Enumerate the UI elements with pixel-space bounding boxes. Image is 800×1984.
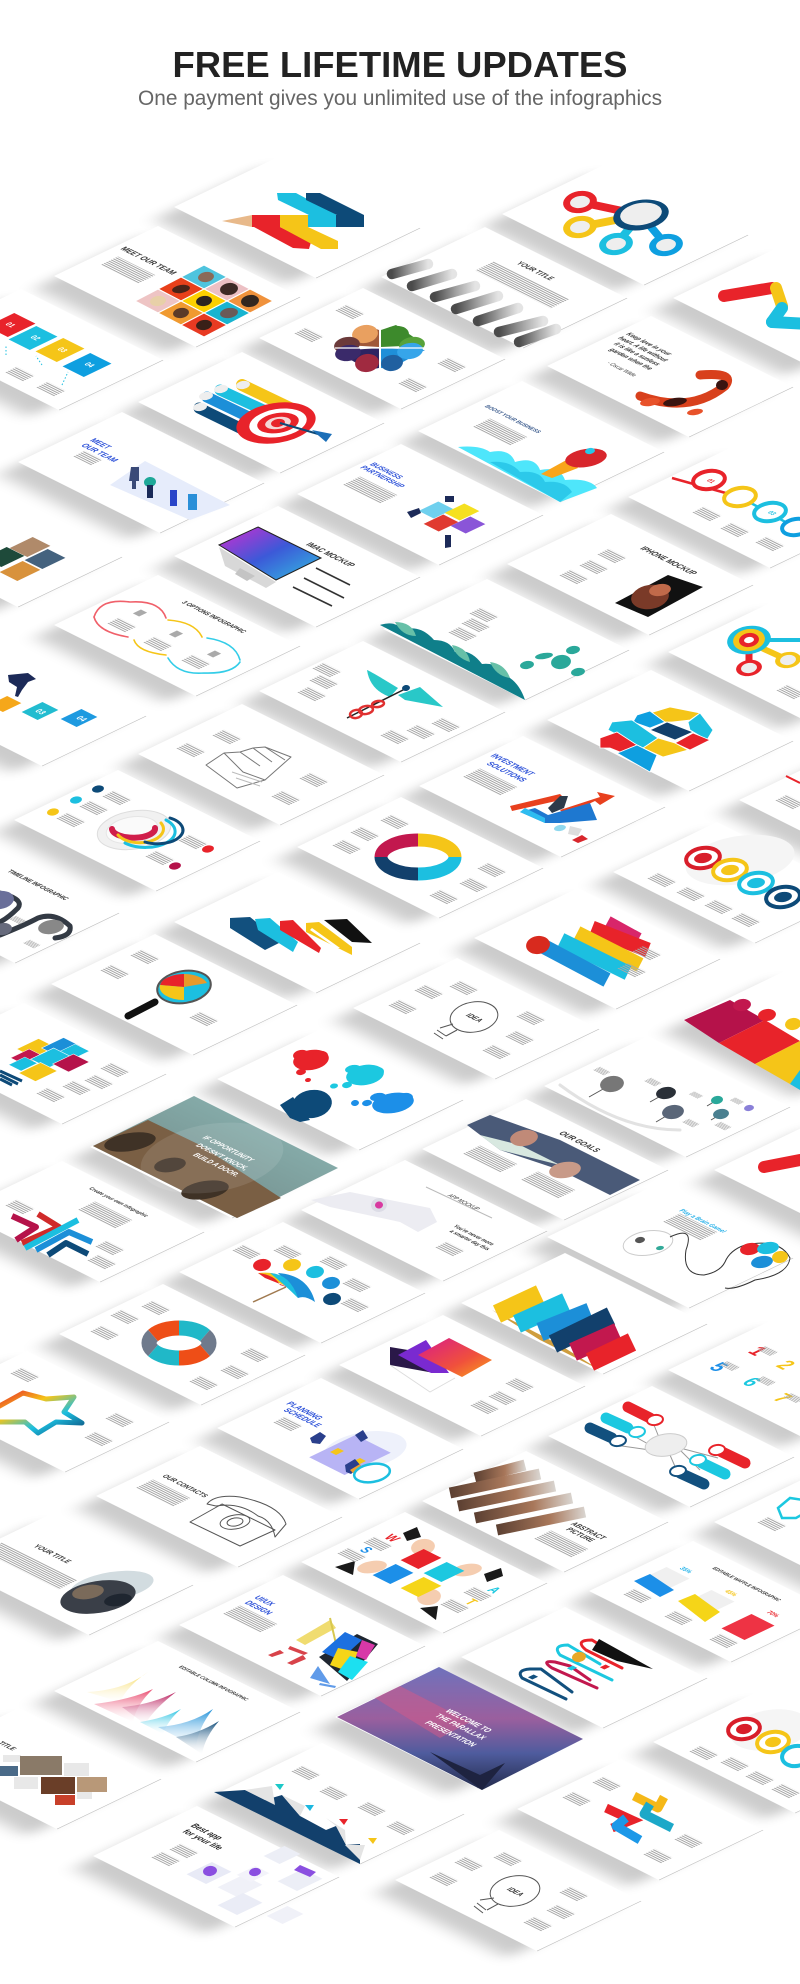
graphic: city splash [58,1566,156,1619]
graphic: cyan cloud [330,1062,385,1089]
timeline circles [685,845,800,910]
slide: iPhone mockup [485,514,753,646]
text [388,981,546,1059]
heading: UI/UX [252,1594,278,1607]
text [5,367,66,396]
slide: arrows pointing in [495,1759,763,1891]
text [232,1245,372,1312]
text [720,1346,800,1403]
pill end rings [609,1414,726,1477]
timeline circles [727,1717,800,1768]
numbers [703,1344,800,1406]
icon: hexagon [778,1498,800,1518]
portrait faces [149,271,260,331]
slide: central node with pills [526,1386,794,1518]
pink horizon [375,1686,470,1738]
heading: WELCOME TO [443,1708,494,1734]
slide: gradient posters [317,1315,585,1447]
numbers: 2 [770,1358,800,1373]
progress bars [293,568,350,606]
slide: graduation paper clips [439,1607,707,1739]
slide: numbered timeline [606,447,800,579]
graphic: puzzle chain: 02 [28,334,43,342]
slide: umbrella [157,1222,425,1354]
heading: Best app [188,1822,226,1841]
graphic: four-petal flower [333,323,426,374]
heading: ABSTRACT [568,1521,609,1541]
slide: business partnership [275,444,543,576]
slide: best app [71,1806,339,1938]
graphic: telephone outline [190,1496,286,1546]
graphic: timeline nodes [672,469,800,537]
slide: flower collage [237,288,505,420]
graphic: mountain strips [392,264,556,342]
text [100,950,219,1026]
heading: OUR GOALS [556,1130,603,1154]
text [776,685,800,699]
slide: stacked ribbons [452,888,720,1020]
percent labels: 35% [677,1566,694,1575]
graphic: phone and crane [268,1618,378,1688]
graphic: steps [497,1294,632,1362]
slide: waffle infographic [567,1541,800,1673]
slide: star [0,1351,169,1483]
heading: APP MOCKUP [445,1194,481,1211]
slide: your title mountain stripes [359,227,627,359]
slide: investment solutions [397,736,665,868]
slide: telephone sketch [74,1446,342,1578]
card shadow [313,1667,581,1799]
text [73,451,103,465]
graphic: puzzle chain: 01 [3,321,18,329]
graphic: diamond photos [0,537,65,581]
text [470,1378,535,1414]
quote: DOESN'T KNOCK, [193,1142,252,1171]
graphic: chain [724,288,800,324]
graphic: cuffs [335,1527,503,1620]
graphic: map [727,1704,800,1756]
slide: timeline infographic road [0,842,119,974]
slide: magnifier [29,934,297,1066]
quote text: it is like a sunless [611,342,662,367]
slide: pencil infographic [152,157,420,289]
graphic: waffle charts [634,1567,775,1640]
text [692,507,785,551]
heading: 3 OPTIONS INFOGRAPHIC [179,600,248,635]
slide: stairs sketch [116,704,384,836]
graphic: pencil and arrows [222,193,364,249]
heading: EDITABLE WAFFLE INFOGRAPHIC [710,1567,782,1603]
text [757,1517,787,1531]
graphic: magnifying glass [128,967,213,1016]
percent labels [677,1566,781,1619]
slide: brain game [525,1187,793,1319]
slide: caduceus [237,641,505,773]
graphic: people [110,461,230,520]
heading: OUR TEAM [78,442,121,463]
slide: head puzzle [525,670,793,802]
heading: Create your own infographic [86,1187,150,1218]
graphic: brain [739,1240,789,1270]
quote text [606,332,674,371]
slide: color ribbons, right edge [661,970,800,1102]
title: FREE LIFETIME UPDATES [172,44,628,85]
quote text: heart. A life without [616,336,670,363]
slide: iMac mockup [152,506,420,638]
graphic: photo strips [450,1465,585,1530]
text [297,663,461,744]
text [273,1417,303,1431]
graphic: six-part ring [149,1328,209,1358]
subtitle: One payment gives you unlimited use of the infographics [138,87,662,110]
graphic: hands photo strip [467,1115,640,1195]
graphic: timeline nodes: 01 [704,478,717,485]
text [448,608,499,641]
numbers: 5 [703,1360,734,1375]
text [90,1301,270,1390]
slide: editable column infographic [32,1641,300,1773]
graphic: puzzle chain: 03 [55,346,70,354]
coast [430,1752,505,1790]
bulb label: IDEA [463,1012,486,1024]
SWOT letters: T [461,1597,481,1607]
heading: DESIGN [242,1600,275,1616]
bullets [47,785,214,870]
divider line [426,1187,492,1218]
text [0,1543,77,1589]
heading [242,1594,278,1616]
slide: welcome to the parallax presentation [313,1667,583,1799]
slide: app mockup watch [279,1160,547,1292]
graphic: poster fan [390,1338,492,1392]
slide: puzzle steps [0,289,163,421]
graphic: app screens [187,1846,322,1924]
text [689,1746,800,1798]
card shadow [68,1097,336,1229]
graphic: umbrella [253,1273,315,1302]
icons [133,610,221,658]
text [10,1368,135,1446]
graphic: center disc [644,1431,688,1459]
slide: map timeline [591,822,800,954]
slide: our goals [400,1099,668,1231]
text [559,549,627,584]
slide: swirl ring [275,797,543,929]
text [151,1844,199,1866]
heading: SOLUTIONS [484,761,530,783]
heading: YOUR TITLE [31,1543,74,1565]
city [93,1120,281,1218]
graphic: nodes [725,623,800,678]
heading: for your life [180,1828,227,1851]
text [775,795,800,809]
slide: abstract picture [400,1451,668,1583]
graphic: puzzle chain [0,313,111,377]
slide: ring infographic [37,1284,305,1416]
text [107,618,211,669]
heading: IPHONE MOCKUP [637,545,700,576]
graphic: timeline nodes: 03 [765,510,778,517]
text [534,1531,588,1557]
slide: meet our team illustration [0,412,264,544]
graphic: red cloud [292,1047,330,1082]
bulb label: IDEA [504,1886,527,1898]
slide: quote with splash [525,316,793,448]
graphic: white arm and watch [311,1192,437,1232]
curved arrows [94,601,240,673]
graphic: ribbon star [0,1393,82,1433]
text [663,1214,717,1240]
graphic: cap [592,1639,653,1669]
heading: BOOST YOUR BUSINESS [482,405,542,434]
graphic: portrait grid [135,265,273,337]
text [593,1067,744,1130]
pins [252,1258,342,1306]
slide: nodes, right edge [646,602,800,734]
slide: mountain timeline [196,1743,464,1875]
lens overlay [136,1113,288,1203]
slide: photo squares [0,1708,161,1840]
graphic: puzzle chain: 04 [82,361,98,369]
heading: YOUR TITLE [514,260,557,282]
slide: hexagon, right edge [692,1472,800,1604]
graphic: pins [560,1074,754,1130]
graphic: target and bars [192,380,332,449]
heading: Play a Brain Game! [677,1208,728,1234]
graphic: hands [356,1537,483,1607]
subheading: You're never more [451,1224,495,1247]
quote text: Keep love in your [624,332,674,357]
slide: arrows infographic [0,1161,204,1293]
heading: SCHEDULE [281,1407,325,1429]
quote: IF OPPORTUNITY [200,1135,257,1163]
graphic: light bulb [434,998,500,1039]
graphic: ribbons [684,998,800,1090]
photos [0,1756,107,1805]
slide: your title city splash [0,1514,193,1646]
graphic: book stack [230,917,372,955]
graphic: wave band [380,622,525,700]
slide: rounded arrows, right edge [651,248,800,380]
icon: red ball [525,934,551,956]
text [623,1589,739,1648]
numbers: 7 [767,1391,798,1406]
graphic: iMac [219,527,321,588]
slide: boost your business rocket [396,381,664,513]
text [56,791,208,865]
heading [422,1708,494,1748]
slide: city photo quote [68,1096,338,1229]
graphic: stairs outline [206,747,291,788]
text [291,1766,416,1835]
graphic: donut [94,805,183,855]
slide: pins on curve [522,1036,790,1168]
graphic: caduceus [347,670,443,719]
quote [190,1135,257,1178]
text [294,305,467,392]
icon: teal shapes [519,645,586,677]
graphic: map [682,828,798,892]
graphic: clouds and rocket [458,446,608,502]
graphic: ribbons [0,673,97,727]
slide: six step arrows [439,1253,707,1385]
text [9,916,41,948]
slide: UI/UX design [157,1575,425,1707]
photo background [93,1096,338,1218]
text [5,1200,132,1269]
markers [275,1784,377,1844]
SWOT letters: S [356,1545,376,1555]
heading: MEET OUR TEAM [118,246,179,276]
text [475,262,569,308]
photo background [337,1667,583,1790]
heading: PARTNERSHIP [358,464,408,489]
text [101,257,155,283]
slide: planning schedule [195,1378,463,1510]
slide: photo mosaic [0,486,122,618]
quote text: garden when the [606,347,655,371]
graphic: pills [590,1407,745,1484]
SWOT letters: W [380,1532,404,1544]
text [617,946,662,977]
graphic: bulb [0,1038,89,1085]
graphic: controller [621,1227,675,1259]
slide: right-edge card [717,750,800,882]
heading: TIMELINE INFOGRAPHIC [5,869,71,902]
graphic: road [0,889,70,938]
text [429,1852,589,1931]
slide: SWOT puzzle [279,1512,547,1644]
graphic: connected circles [561,188,685,259]
graphic: red splash [639,374,729,416]
graphic: red pill [764,1160,800,1167]
red line [786,776,800,783]
attribution: - Oscar Wilde [605,361,637,378]
graphic: blue cloud [351,1090,415,1116]
graphic: peaks [87,1672,219,1754]
heading: PRESENTATION [422,1720,479,1748]
connector stems [6,345,68,385]
numbers: 1 [742,1344,773,1359]
slide: numbers list, right edge [646,1320,800,1452]
slide: ribbon steps [0,645,146,777]
slide: meet our team photos [32,226,300,358]
numbers: 6 [736,1375,767,1390]
text [223,1606,277,1632]
text [176,730,329,805]
slide: target infographic [116,352,384,484]
slide: idea bulb sketch [331,958,599,1090]
text [473,419,527,445]
light squares [3,1755,92,1799]
quote: BUILD A DOOR. [190,1152,243,1178]
graphic: details [528,1651,610,1680]
text [562,1777,704,1863]
SWOT letters: A [483,1585,505,1595]
graphic: head [280,1087,334,1122]
graphic: connectors [615,1425,718,1478]
text [647,873,761,927]
text [337,1537,493,1613]
graphic: phone [615,575,703,617]
slide: teal waves [361,579,629,711]
graphic: swirl [381,840,455,874]
heading: IMAC MOCKUP [303,541,358,569]
text [463,769,517,795]
heading: OUR CONTACTS [160,1474,210,1499]
percent labels: 70% [764,1610,781,1619]
slide: 3 options infographic [32,575,300,707]
slide: books [152,872,420,1004]
graphic: mountains [214,1786,365,1864]
slide: donut chart [0,770,260,902]
graphic: shadows under steps [492,1310,600,1370]
slide: idea bulb sketch 2 [373,1830,641,1962]
SWOT letters [356,1532,505,1607]
slide: light bulb puzzle [0,1003,166,1135]
slide: map timeline, right edge [631,1692,800,1824]
text [343,477,397,503]
heading: THE PARALLAX [432,1713,489,1741]
graphic: arrows [12,1214,92,1255]
heading: MEET [87,437,114,450]
slide: thought clouds [195,1029,463,1161]
graphic: arrows [606,1796,672,1840]
graphic: calendar [309,1426,409,1485]
graphic: ribbons: 04 [74,715,90,723]
text [136,1480,190,1506]
text [463,1146,575,1198]
percent labels: 45% [722,1589,739,1598]
slide: red bar, right edge [692,1120,800,1252]
subheading: a smarter day this [447,1230,491,1251]
graphic: isometric growth [510,792,615,843]
heading: INVESTMENT [488,753,537,777]
graphic: light bulb [474,1872,542,1913]
graphic: puzzle head [600,707,713,772]
heading: PICTURE [563,1526,598,1543]
heading: EDITABLE COLUMN INFOGRAPHIC [176,1665,250,1702]
text [332,815,507,904]
heading: BUSINESS [367,461,406,480]
text [435,1242,465,1256]
city shadows [103,1129,230,1203]
graphic: puzzle pieces [373,1549,464,1597]
graphic: colored bars [541,923,648,980]
graphic: puzzle people [407,496,485,548]
slide: circle nodes [480,164,748,296]
graphic: clips [520,1640,622,1699]
text [36,1063,130,1102]
heading: PLANNING [284,1401,325,1421]
graphic: ribbons: 03 [33,708,49,716]
graphic: cable and head [670,1233,790,1288]
